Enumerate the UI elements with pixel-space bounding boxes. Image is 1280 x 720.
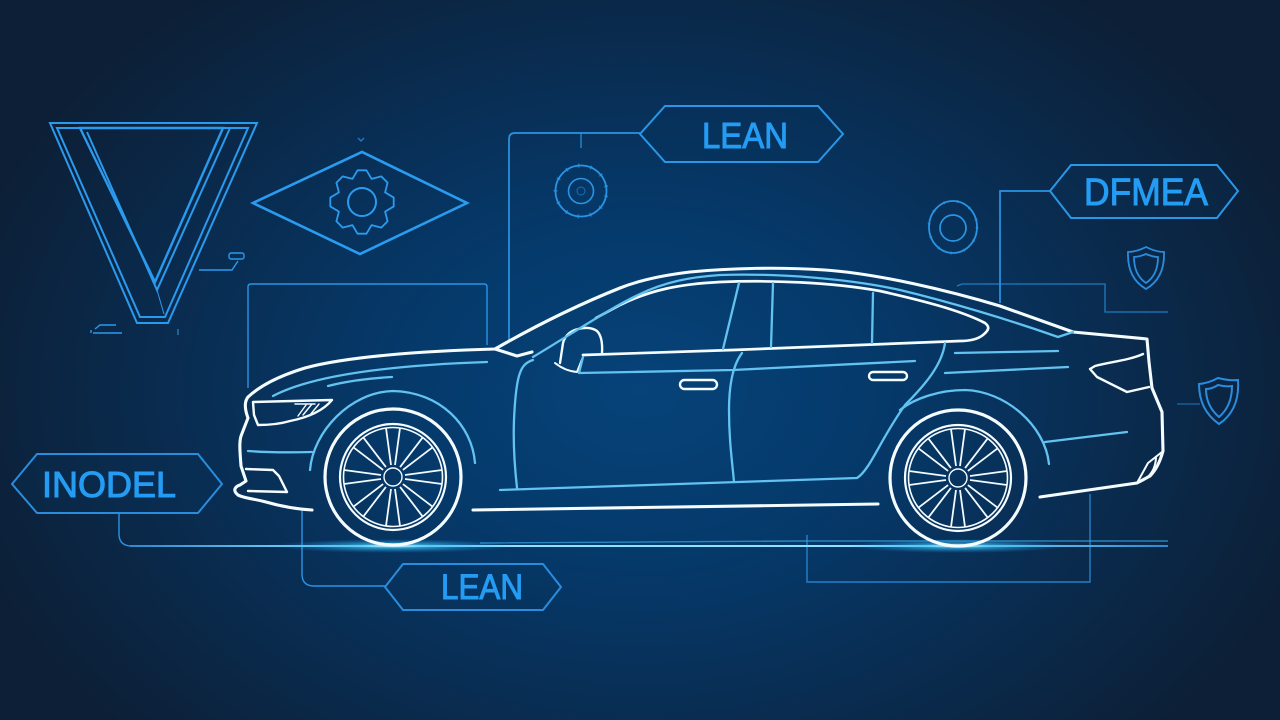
front wheel [325, 409, 461, 545]
icon: dial right [929, 201, 977, 253]
door handle rear [869, 372, 907, 380]
door handle front [680, 380, 717, 389]
icon: diamond with gear [253, 152, 467, 254]
label: LEAN bottom: LEAN [441, 568, 523, 607]
icon: V-model annotations [91, 138, 364, 335]
label: LEAN top: LEAN [702, 115, 788, 156]
label: model [12, 454, 222, 513]
roof rail [533, 275, 1073, 357]
headlight [253, 400, 332, 425]
car outline [235, 268, 1163, 510]
window pillars [723, 283, 873, 349]
lower door line and rear door edge [500, 343, 945, 490]
icon: shield upper [1128, 247, 1164, 289]
connector lines [119, 133, 1200, 586]
rear wheel [890, 410, 1026, 546]
lower grille [246, 469, 287, 492]
label: DFMEA [1050, 165, 1238, 218]
mirror [560, 328, 602, 363]
front door edge [514, 360, 533, 488]
icon: dial top [551, 161, 611, 221]
label: LEAN bottom [385, 564, 561, 610]
icon: V-model diagram [50, 123, 257, 323]
window line [583, 281, 988, 355]
rear wheel arch [900, 390, 1049, 464]
rear bumper detail [1137, 452, 1162, 483]
hood lines [273, 362, 487, 396]
headlight detail [295, 404, 319, 416]
label: DFMEA: DFMEA [1084, 172, 1209, 214]
mirror base [555, 357, 583, 372]
car body outline [235, 268, 1163, 510]
front wheel arch [310, 391, 475, 470]
label: LEAN top [640, 106, 843, 162]
tail light [1090, 354, 1149, 392]
A pillar return [495, 349, 532, 356]
sill line [473, 504, 878, 510]
ground line with glow [130, 539, 1168, 553]
icon: shield lower [1199, 378, 1238, 424]
centre door shut [729, 353, 742, 482]
rear body lines [945, 351, 1127, 442]
label: model: INODEL [42, 464, 176, 505]
bumper line [248, 451, 312, 452]
car accent lines [248, 275, 1127, 490]
belt line [579, 357, 915, 373]
